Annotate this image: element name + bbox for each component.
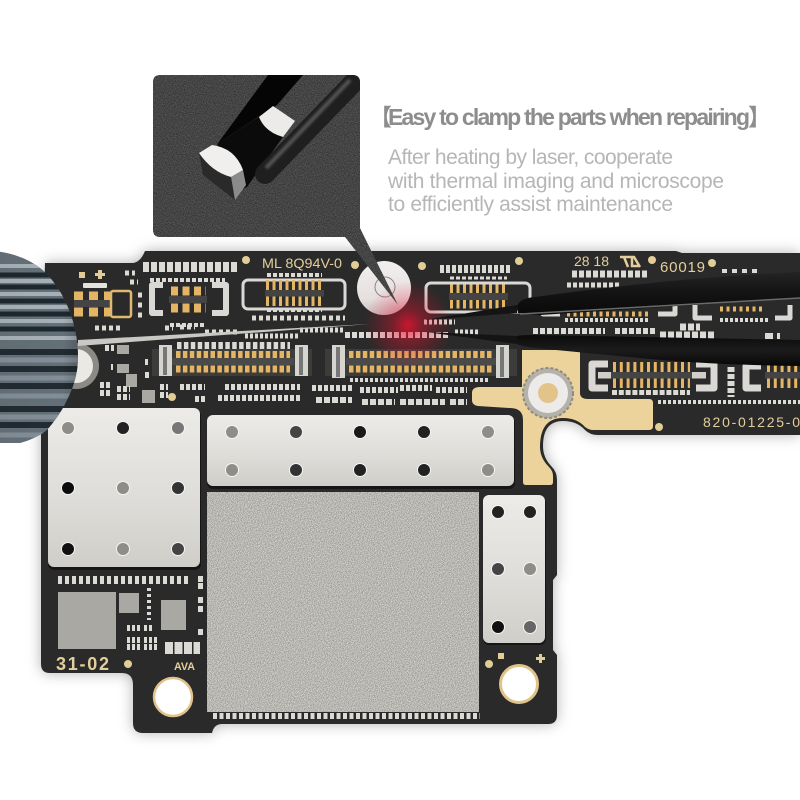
tweezers: [425, 272, 800, 366]
board label: ML 8Q94V-0: ML 8Q94V-0: [262, 255, 342, 271]
gold mounting hole left: [154, 678, 192, 716]
tweezer lower arm: [425, 332, 800, 366]
board label: AVA: AVA: [174, 661, 195, 673]
connector: top left gold: [74, 283, 131, 317]
connector: long right: [325, 345, 517, 378]
heading: 【: [369, 104, 392, 130]
shield: middle wide: [207, 415, 515, 489]
connector: long left: [152, 345, 312, 376]
bottom component row: [213, 713, 480, 719]
board label: 28 18: 28 18: [574, 253, 609, 269]
small parts cluster, lower left: [58, 579, 205, 649]
connector: frame beside washer: [426, 278, 530, 312]
board label: 60019: 60019: [660, 259, 705, 276]
gold copper strip: [472, 350, 653, 485]
connector: under tweezers: [543, 303, 790, 318]
inset panel: clamping detail: [153, 75, 398, 305]
board label: 31-02: 31-02: [56, 654, 109, 674]
connector: lower right: [592, 364, 731, 397]
screwdriver knob: [0, 252, 78, 443]
board outline: [41, 251, 800, 733]
icon: certification mark: [620, 257, 640, 267]
description text: [387, 146, 724, 216]
tweezer upper arm: [425, 272, 800, 320]
board label: 820-01225-0: 820-01225-0: [703, 414, 800, 430]
inset chip and tweezer tips: [199, 75, 356, 200]
shield: mesh large: [207, 492, 479, 712]
description text: to efficiently assist maintenance: [388, 193, 673, 216]
red laser glow: [364, 281, 452, 369]
description text: with thermal imaging and microscope: [387, 170, 724, 193]
connector: left silver bracket: [152, 285, 226, 313]
description text: After heating by laser, cooperate: [388, 146, 673, 169]
heading: 】: [748, 104, 771, 130]
shield: left square: [48, 408, 201, 570]
shield: right narrow: [483, 495, 546, 645]
heading: Easy to clamp the parts when repairing: [388, 104, 750, 130]
connector: silver frame ML: [243, 280, 345, 309]
gold dots and markers: [79, 256, 716, 668]
washer near laser: [357, 261, 411, 315]
panel background with pointer: [153, 75, 398, 305]
threaded standoff behind knob: [53, 343, 99, 389]
connector: far right: [746, 366, 800, 388]
needle from knob: [78, 324, 370, 346]
gold mounting hole right: [500, 666, 538, 702]
threaded standoff right: [523, 368, 573, 418]
small parts cluster, middle: [100, 345, 467, 403]
board components: top rows: [95, 267, 800, 402]
